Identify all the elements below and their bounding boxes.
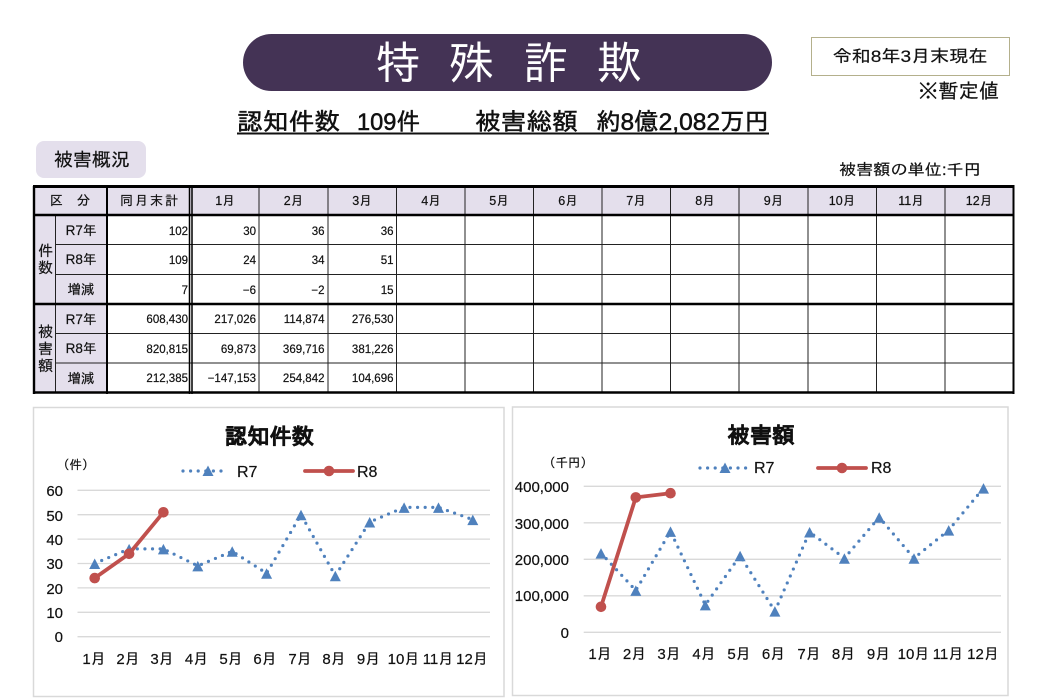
table header row: 5月	[489, 194, 509, 208]
y axis labels	[46, 483, 63, 646]
summary headline: 約8億2,082万円	[596, 109, 769, 136]
x axis labels: 8月	[322, 651, 346, 668]
table header row: 区 分	[50, 193, 90, 208]
y axis labels: 0	[561, 625, 569, 642]
table header row: 同月末計	[120, 193, 178, 208]
chart title: 認知件数	[225, 424, 314, 449]
x axis labels	[82, 651, 488, 668]
table values: −2	[311, 285, 324, 297]
date box	[812, 38, 1010, 76]
summary headline: 109件	[357, 109, 420, 136]
y axis labels: 100,000	[515, 588, 569, 605]
x axis labels: 5月	[219, 651, 243, 668]
y axis labels: 400,000	[515, 479, 569, 496]
section label: 被害概況	[36, 141, 146, 178]
title banner	[243, 34, 772, 91]
table row group labels: 被	[38, 324, 53, 341]
data table	[33, 186, 1014, 394]
table values: 254,842	[283, 373, 324, 385]
x axis labels: 2月	[116, 651, 140, 668]
x axis labels: 5月	[727, 646, 751, 663]
table values: 69,873	[221, 344, 256, 356]
legend: R7	[754, 460, 775, 477]
table values: 276,530	[352, 314, 394, 326]
table header row: 10月	[829, 194, 855, 208]
x axis labels: 3月	[150, 651, 174, 668]
title banner: 特	[376, 38, 420, 89]
y axis labels: 300,000	[515, 516, 569, 533]
x axis labels: 7月	[797, 646, 821, 663]
table header row: 6月	[558, 194, 578, 208]
table header row: 3月	[352, 194, 372, 208]
table values: −6	[243, 285, 256, 297]
table row group labels: 害	[38, 341, 53, 358]
x axis labels: 1月	[588, 646, 612, 663]
y axis labels: 50	[46, 508, 63, 525]
table header row: 11月	[898, 194, 924, 208]
table header row: 2月	[284, 194, 303, 208]
y axis labels: 10	[46, 605, 63, 622]
x axis labels: 11月	[933, 646, 963, 663]
table values	[146, 226, 394, 385]
provisional note: ※暫定値	[918, 81, 999, 103]
y axis labels: 0	[55, 629, 63, 646]
table header row: 8月	[695, 194, 715, 208]
table shaded cells	[34, 187, 1013, 393]
x axis labels: 1月	[82, 651, 106, 668]
table row labels: R7年	[66, 223, 96, 238]
y axis labels: 200,000	[515, 552, 569, 569]
chart title: 被害額	[728, 423, 794, 448]
table row group labels: 数	[38, 260, 53, 277]
table row labels: R7年	[66, 312, 96, 327]
y axis labels: 30	[46, 556, 63, 573]
x axis labels: 6月	[762, 646, 785, 663]
y axis labels: 20	[46, 581, 63, 598]
title banner: 欺	[596, 38, 642, 89]
x axis labels: 4月	[185, 651, 208, 668]
table values: 104,696	[352, 373, 394, 385]
table header row: 12月	[966, 194, 992, 208]
chart: 認知件数	[34, 408, 504, 696]
table values: −147,153	[208, 373, 256, 385]
table row labels: R8年	[66, 252, 96, 267]
table row labels: 増減	[68, 282, 94, 297]
table header row: 4月	[421, 194, 441, 208]
table values: 114,874	[284, 314, 325, 326]
table values: 102	[169, 226, 188, 238]
table grid lines	[56, 186, 1014, 393]
x axis labels: 2月	[623, 646, 646, 663]
x axis labels: 7月	[288, 651, 312, 668]
table row labels: 増減	[68, 371, 94, 386]
table values: 212,385	[146, 373, 188, 385]
legend: R8	[357, 464, 378, 481]
table values: 36	[381, 226, 394, 238]
x axis labels: 12月	[967, 646, 999, 663]
table values: 24	[243, 255, 257, 267]
title banner: 詐	[524, 38, 568, 89]
title banner: 殊	[448, 38, 494, 89]
legend	[700, 460, 892, 477]
table header row: 7月	[626, 194, 646, 208]
y axis labels	[515, 479, 569, 642]
table header row: 1月	[215, 194, 235, 208]
x axis labels: 6月	[253, 651, 277, 668]
x axis labels	[588, 646, 999, 663]
summary headline: 認知件数	[237, 109, 340, 136]
x axis labels: 12月	[456, 651, 488, 668]
y axis labels: 60	[46, 483, 63, 500]
x axis labels: 8月	[832, 646, 855, 663]
x axis labels: 9月	[867, 646, 890, 663]
unit label: （件）	[57, 458, 94, 472]
table values: 820,815	[146, 344, 188, 356]
x axis labels: 4月	[692, 646, 716, 663]
table header row: 9月	[764, 194, 783, 208]
table values: 381,226	[352, 344, 394, 356]
table values: 217,026	[214, 314, 256, 326]
x axis labels: 10月	[388, 651, 419, 668]
legend: R8	[871, 460, 892, 477]
table values: 30	[243, 226, 256, 238]
series R7	[89, 502, 478, 581]
table row labels: R8年	[66, 341, 96, 356]
table values: 51	[381, 255, 394, 267]
table values: 15	[381, 285, 394, 297]
x axis labels: 10月	[898, 646, 929, 663]
summary headline	[237, 109, 769, 136]
table row group labels: 額	[38, 358, 53, 375]
table row labels	[66, 223, 96, 386]
summary headline: 被害総額	[475, 109, 578, 136]
table values: 109	[169, 255, 188, 267]
unit label: （千円）	[543, 456, 593, 470]
table values: 369,716	[283, 344, 324, 356]
section label: 被害概況: 被害概況	[54, 149, 130, 170]
table values: 608,430	[146, 314, 188, 326]
chart: 被害額	[512, 407, 1008, 696]
table row group labels	[38, 243, 53, 375]
legend	[183, 464, 378, 481]
series R8	[596, 488, 676, 612]
y axis labels: 40	[46, 532, 63, 549]
date box: 令和8年3月末現在	[832, 47, 988, 66]
x axis labels: 9月	[357, 651, 380, 668]
series R7	[596, 483, 989, 617]
x axis labels: 11月	[423, 651, 453, 668]
table header row	[50, 193, 992, 208]
table values: 7	[182, 285, 188, 297]
unit note: 被害額の単位:千円	[839, 162, 981, 179]
table values: 36	[312, 226, 324, 238]
legend: R7	[237, 464, 258, 481]
x axis labels: 3月	[657, 646, 681, 663]
table row group labels: 件	[38, 243, 53, 260]
table values: 34	[312, 255, 325, 267]
series R8	[89, 507, 169, 583]
